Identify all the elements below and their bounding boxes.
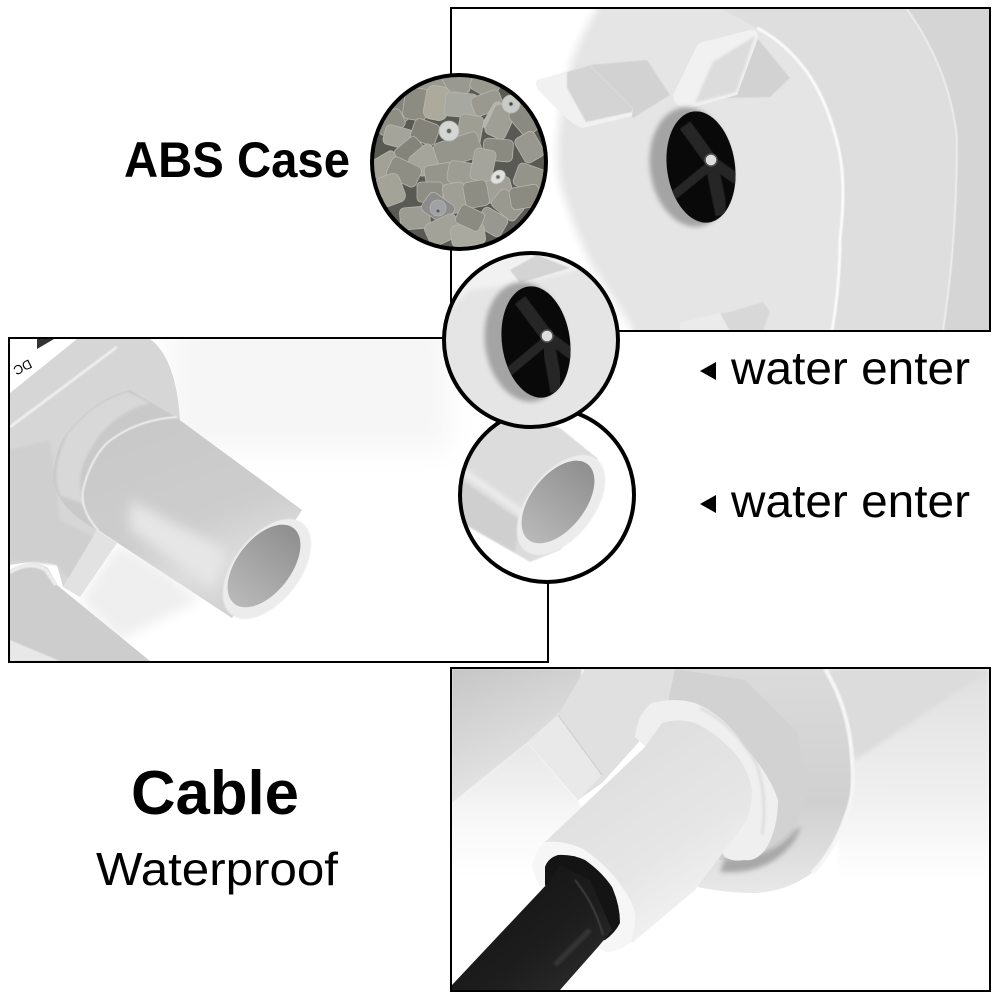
right casing fade xyxy=(828,669,989,834)
zoom circle: socket detail xyxy=(440,250,618,427)
tube opening xyxy=(545,855,620,945)
black cable xyxy=(452,879,612,990)
lower tube xyxy=(10,563,150,661)
recess shadow xyxy=(647,104,723,229)
tube rim xyxy=(222,519,311,619)
lower fade under casing xyxy=(453,742,580,819)
collar xyxy=(635,700,778,861)
socket hole with cross xyxy=(666,111,736,223)
bottom tab xyxy=(721,302,770,330)
device outer body xyxy=(722,9,989,330)
panel: bottom cable gland photo xyxy=(451,668,990,991)
heading: ABS Case: ABS Case xyxy=(124,132,350,188)
casing body xyxy=(10,339,180,587)
label: Waterproof: Waterproof xyxy=(96,843,338,895)
tube xyxy=(545,720,752,943)
tube rim xyxy=(532,842,635,952)
socket plate xyxy=(560,9,680,330)
label tab on casing: DC xyxy=(11,356,34,378)
tube rim xyxy=(516,455,605,555)
flange xyxy=(678,669,853,893)
collar xyxy=(53,390,177,530)
tube opening xyxy=(522,460,594,544)
right tab xyxy=(673,30,790,108)
tube highlight xyxy=(127,502,220,582)
back ring xyxy=(668,669,777,860)
left tab xyxy=(536,60,670,128)
panel: left water inlet tube photo xyxy=(9,320,548,662)
label: water enter 2: water enter xyxy=(730,475,970,527)
upper casing fade xyxy=(452,669,585,803)
plate edge highlight xyxy=(757,28,843,331)
zoom circle: water inlet tube detail xyxy=(450,400,634,582)
lower strut xyxy=(63,530,117,597)
heading: Cable: Cable xyxy=(131,759,299,828)
strut xyxy=(558,669,678,800)
soft background shadow xyxy=(190,339,430,432)
label tab on casing xyxy=(14,339,54,374)
pellet end holes xyxy=(430,95,520,216)
tube opening xyxy=(228,524,300,608)
main tube xyxy=(83,418,302,618)
flange shadow xyxy=(720,827,800,872)
panel: top-right socket photo xyxy=(451,8,990,331)
zoom circle: ABS pellets texture xyxy=(368,69,548,249)
label: water enter 1: water enter xyxy=(730,342,970,394)
